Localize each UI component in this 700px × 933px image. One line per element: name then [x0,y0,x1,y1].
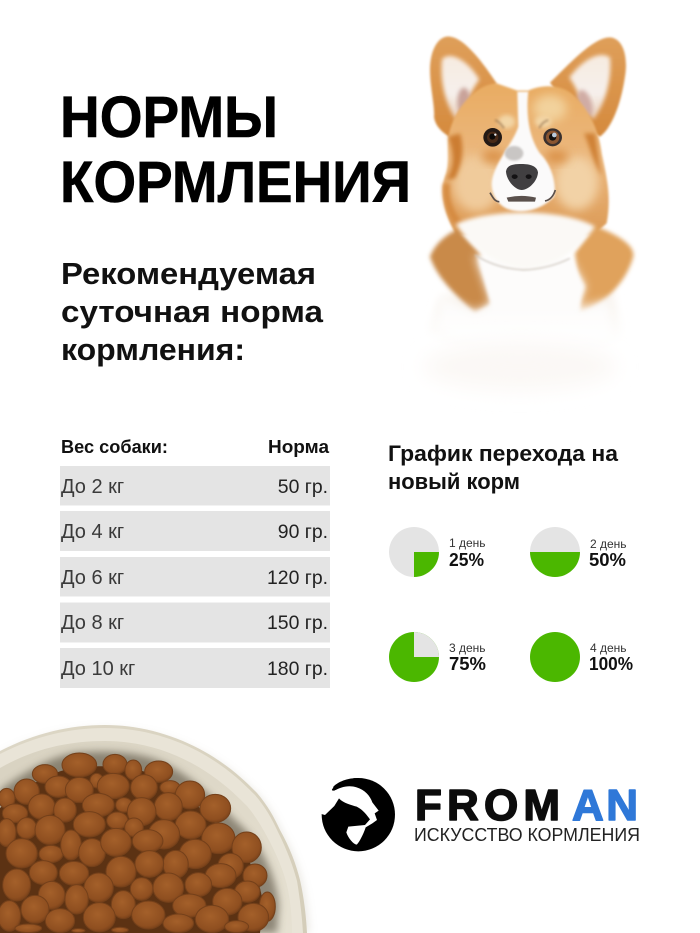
row: 8 kg: До 8 кг [61,612,124,634]
photo: bowl of kibble [0,725,310,933]
bottom fade [400,307,640,370]
row: 10 kg: До 10 кг [61,658,135,680]
table header [61,437,330,457]
row: 8 kg [60,602,330,642]
pie: day 2: 2 день [590,537,627,551]
eyes [483,128,562,147]
right ear [550,37,626,137]
pie: day 4: 4 день [590,641,627,655]
title: НОРМЫ [60,85,278,150]
row: 2 kg [60,466,330,506]
row: 6 kg [60,557,330,596]
row: 2 kg: 50 гр. [278,476,328,498]
white chest [435,213,615,351]
subtitle: суточная норма [61,294,324,329]
logo icon: dog and human profile [317,778,395,851]
row: 4 kg [60,511,330,551]
row: 6 kg: 120 гр. [267,567,328,589]
heading: transition schedule: новый корм [388,469,520,494]
row: 10 kg [60,648,330,688]
logo: Froman [317,778,640,851]
pie: day 1 [389,527,486,577]
row: 6 kg: До 6 кг [61,567,124,589]
shoulders [430,225,633,313]
table header: Норма [268,437,330,457]
logo tagline: ИСКУССТВО КОРМЛЕНИЯ [414,825,640,845]
heading: transition schedule [388,441,619,494]
left ear [430,37,497,138]
row: 4 kg: 90 гр. [278,521,328,543]
table: feeding norms [60,437,330,688]
row: 2 kg: До 2 кг [61,476,124,498]
table header: Вес собаки: [61,437,168,457]
subtitle: Рекомендуемая [61,256,316,291]
pie: day 2: 50% [589,550,626,570]
faint lower shading [423,343,617,390]
title [60,85,411,215]
heading: transition schedule: График перехода на [388,441,619,466]
logo wordmark: FROM [415,781,560,830]
nose and mouth [490,164,555,202]
pie: day 2 [530,527,627,577]
pie: day 1: 25% [449,550,484,570]
row: 4 kg: До 4 кг [61,521,124,543]
pie: day 1: 1 день [449,536,486,550]
head [443,83,610,235]
pie: day 3: 75% [449,654,486,674]
kibble pieces [0,753,275,933]
pie: day 4 [530,632,633,682]
pie: day 4: 100% [589,654,633,674]
subtitle [61,256,324,367]
pie: day 3 [389,632,486,682]
title: КОРМЛЕНИЯ [60,150,411,215]
logo wordmark: AN [572,781,638,830]
pie: day 3: 3 день [449,641,486,655]
subtitle: кормления: [61,332,245,367]
row: 10 kg: 180 гр. [267,658,328,680]
row: 8 kg: 150 гр. [267,612,328,634]
photo: corgi dog [400,37,640,390]
rear body [430,290,620,354]
logo wordmark [415,781,638,830]
